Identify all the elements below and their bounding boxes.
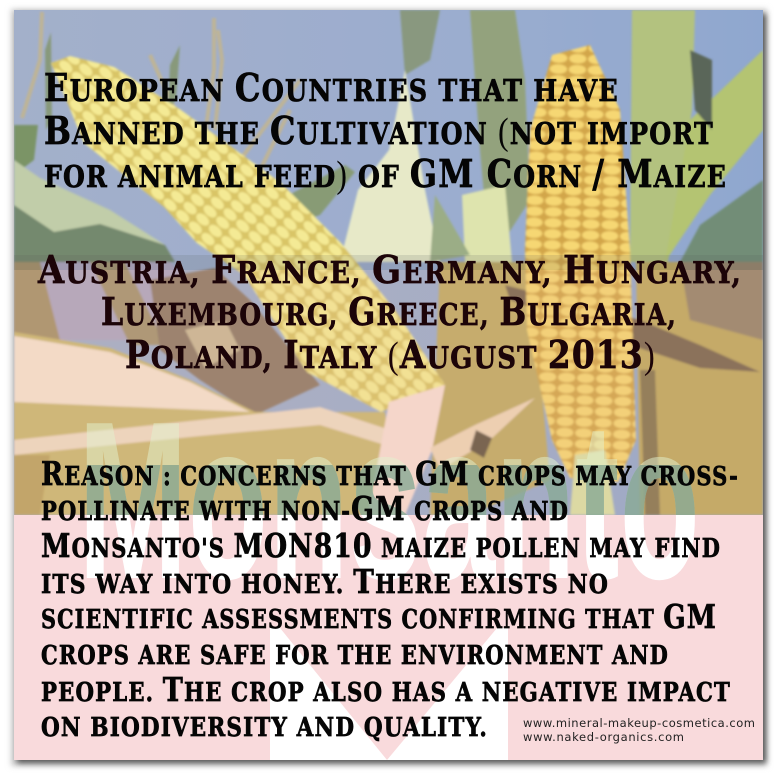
title: FOR ANIMAL FEED) OF GM CORN / MAIZE [44,151,727,196]
lower husks [14,332,400,515]
list of countries: AUSTRIA, FRANCE, GERMANY, HUNGARY, [37,247,742,292]
warm tint band [14,270,763,515]
title [44,65,727,196]
transition band [14,255,763,270]
website credits: www.mineral-makeup-cosmetica.com [523,716,755,730]
pale leaf at left [14,160,165,245]
panel: corn photograph background [14,10,763,515]
left corn cob [51,56,445,412]
lower left stalks over lilac sky [14,262,250,340]
reason text block: ITS WAY INTO HONEY. THERE EXISTS NO [41,562,609,601]
reason text block: ON BIODIVERSITY AND QUALITY. [41,713,488,743]
panel: pink lower section [14,515,763,760]
website credits: www.naked-organics.com [523,730,684,744]
title: BANNED THE CULTIVATION (NOT IMPORT [44,108,714,153]
list of countries: LUXEMBOURG, GREECE, BULGARIA, [101,289,677,334]
leaves around right cob [400,10,440,75]
logo: large white M mark [270,628,508,760]
right-hand husks [430,262,550,515]
dark husk behind cob [150,268,320,415]
green leaf at left, shadow side [14,205,175,262]
right corn cob [525,45,636,482]
pale wash on warm band [14,270,763,515]
title: EUROPEAN COUNTRIES THAT HAVE [44,65,619,110]
dry tassels top left [22,12,300,170]
website credits [523,716,755,744]
list of countries: POLAND, ITALY (AUGUST 2013) [125,332,656,377]
cool pale wash on top [14,10,763,255]
list of countries [37,247,742,377]
reason text block [41,454,739,743]
reason text block: POLLINATE WITH NON-GM CROPS AND [41,489,569,528]
pink husks in the centre [368,385,445,515]
